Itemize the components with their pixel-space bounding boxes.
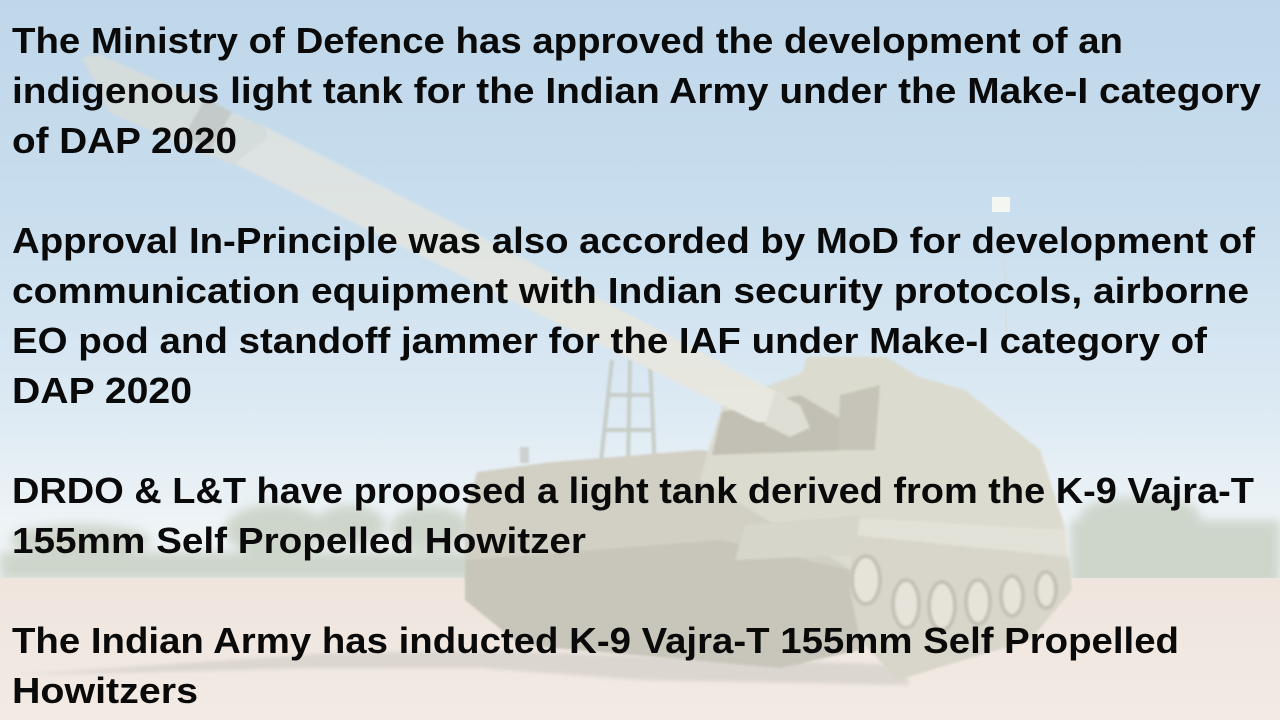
hull front [465, 450, 860, 665]
howitzer barrel [82, 55, 810, 437]
text block: Ministry of Defence approval: of DAP 2020 [12, 120, 237, 161]
turret [700, 357, 1069, 575]
road wheels [852, 556, 1056, 630]
text block: Approval In-Principle: EO pod and standoff jammer for the IAF under Make-I category of [12, 320, 1208, 361]
track [850, 535, 1072, 680]
text block: Ministry of Defence approval [12, 20, 1261, 161]
flag on hull [520, 447, 529, 463]
crane frame [600, 360, 655, 470]
background: ground [0, 578, 1280, 720]
text block: DRDO and L&T proposal: 155mm Self Propelled Howitzer [12, 520, 586, 561]
muzzle band [185, 98, 232, 150]
text block: DRDO and L&T proposal: DRDO & L&T have proposed a light tank derived from the K-9 Vajra-T [12, 470, 1254, 511]
text block: Indian Army induction [12, 620, 1179, 711]
flag [992, 197, 1010, 350]
background: ground shadow [15, 650, 910, 685]
text block: Ministry of Defence approval: The Ministry of Defence has approved the development of an [12, 20, 1123, 61]
hull lower dark [465, 540, 860, 668]
turret dark gap [712, 395, 860, 455]
background: tree line [0, 497, 1280, 586]
background: howitzer [465, 357, 1072, 680]
text block: Approval In-Principle: Approval In-Principle was also accorded by MoD for development of [12, 220, 1256, 261]
text block: Approval In-Principle: DAP 2020 [12, 370, 192, 411]
text block: Ministry of Defence approval: indigenous light tank for the Indian Army under the Make-I category [12, 70, 1261, 111]
barrel collar [765, 392, 810, 437]
text block: Approval In-Principle [12, 220, 1256, 411]
text block: Indian Army induction: The Indian Army has inducted K-9 Vajra-T 155mm Self Propelled [12, 620, 1179, 661]
text block: DRDO and L&T proposal [12, 470, 1254, 561]
barrel tube [233, 125, 804, 425]
front fender [735, 515, 860, 560]
muzzle brake [82, 55, 268, 165]
text block: Approval In-Principle: communication equipment with Indian security protocols, airborne [12, 270, 1249, 311]
side skirt [852, 518, 1068, 556]
text block: Indian Army induction: Howitzers [12, 670, 198, 711]
